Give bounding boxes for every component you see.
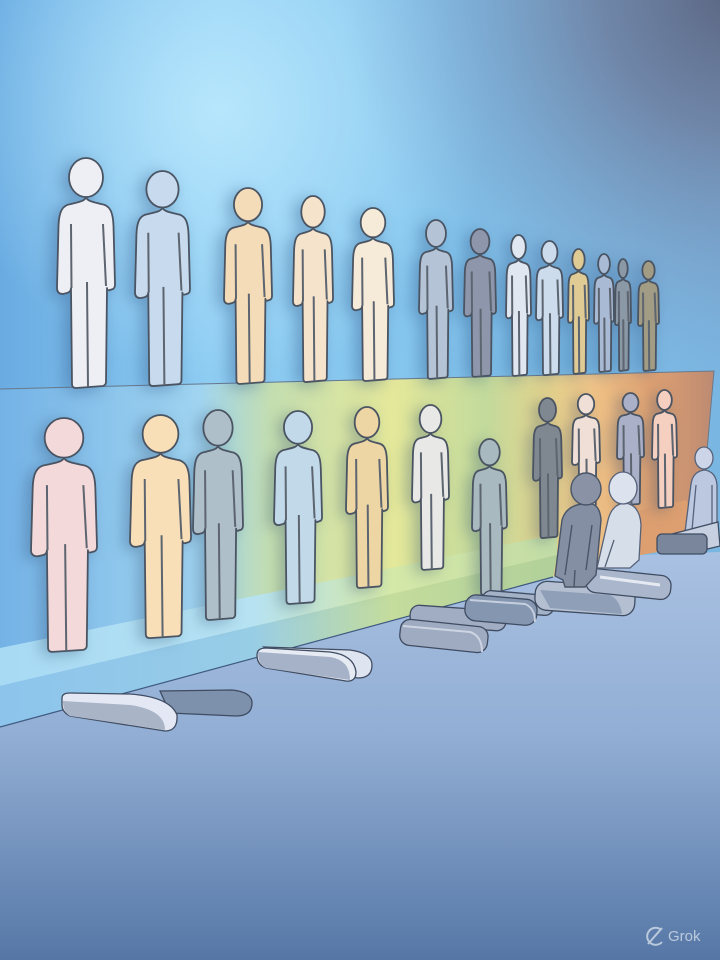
stepped ledge: [0, 534, 557, 727]
figure 1: [31, 418, 97, 652]
seated figure right: [685, 447, 717, 532]
figure 3: [224, 188, 272, 384]
slab pair 4: [464, 590, 555, 626]
lower coloured wall: [0, 371, 714, 700]
figure 8: [506, 235, 531, 376]
seated dark figure: [555, 473, 601, 587]
figure 7: [472, 439, 507, 595]
figure 10: [568, 249, 589, 374]
figure 4: [274, 411, 322, 604]
watermark: [647, 928, 701, 945]
figure 9: [536, 241, 563, 375]
slab 6: [585, 568, 672, 600]
icon: logo: [647, 928, 662, 945]
figure 9: [572, 394, 600, 514]
figure 2: [135, 171, 190, 386]
slab pair 3: [399, 605, 507, 654]
wall top edge: [0, 371, 714, 530]
figure 13: [638, 261, 659, 371]
lower step on right: [640, 500, 700, 555]
figure 11: [594, 254, 614, 372]
figure 8: [533, 398, 562, 538]
background wall: [0, 0, 720, 560]
figure 5: [352, 208, 394, 381]
slab 5: [534, 581, 636, 616]
ledge front: [0, 555, 557, 727]
ledge floor line: [0, 577, 553, 727]
floor: [0, 552, 720, 960]
figure 11: [652, 390, 677, 508]
logo text: Grok: [668, 928, 701, 945]
figure 10: [617, 393, 644, 505]
slab 7: [657, 522, 720, 554]
figure 6: [419, 220, 453, 379]
figure 3: [193, 410, 243, 620]
figure 4: [293, 196, 333, 382]
figure 6: [412, 405, 449, 570]
bottom row of standing figures: [31, 390, 677, 652]
figure 7: [464, 229, 496, 377]
top row of standing figures: [57, 158, 659, 388]
fallen slabs: [62, 522, 720, 731]
slab pair 2: [257, 647, 372, 681]
seated light figure: [597, 472, 641, 568]
figure 5: [346, 407, 388, 588]
figure 12: [615, 259, 631, 371]
ledge top: [0, 534, 557, 686]
slab pair 1: [62, 690, 252, 731]
figure 2: [130, 415, 191, 638]
figure 1: [57, 158, 115, 388]
